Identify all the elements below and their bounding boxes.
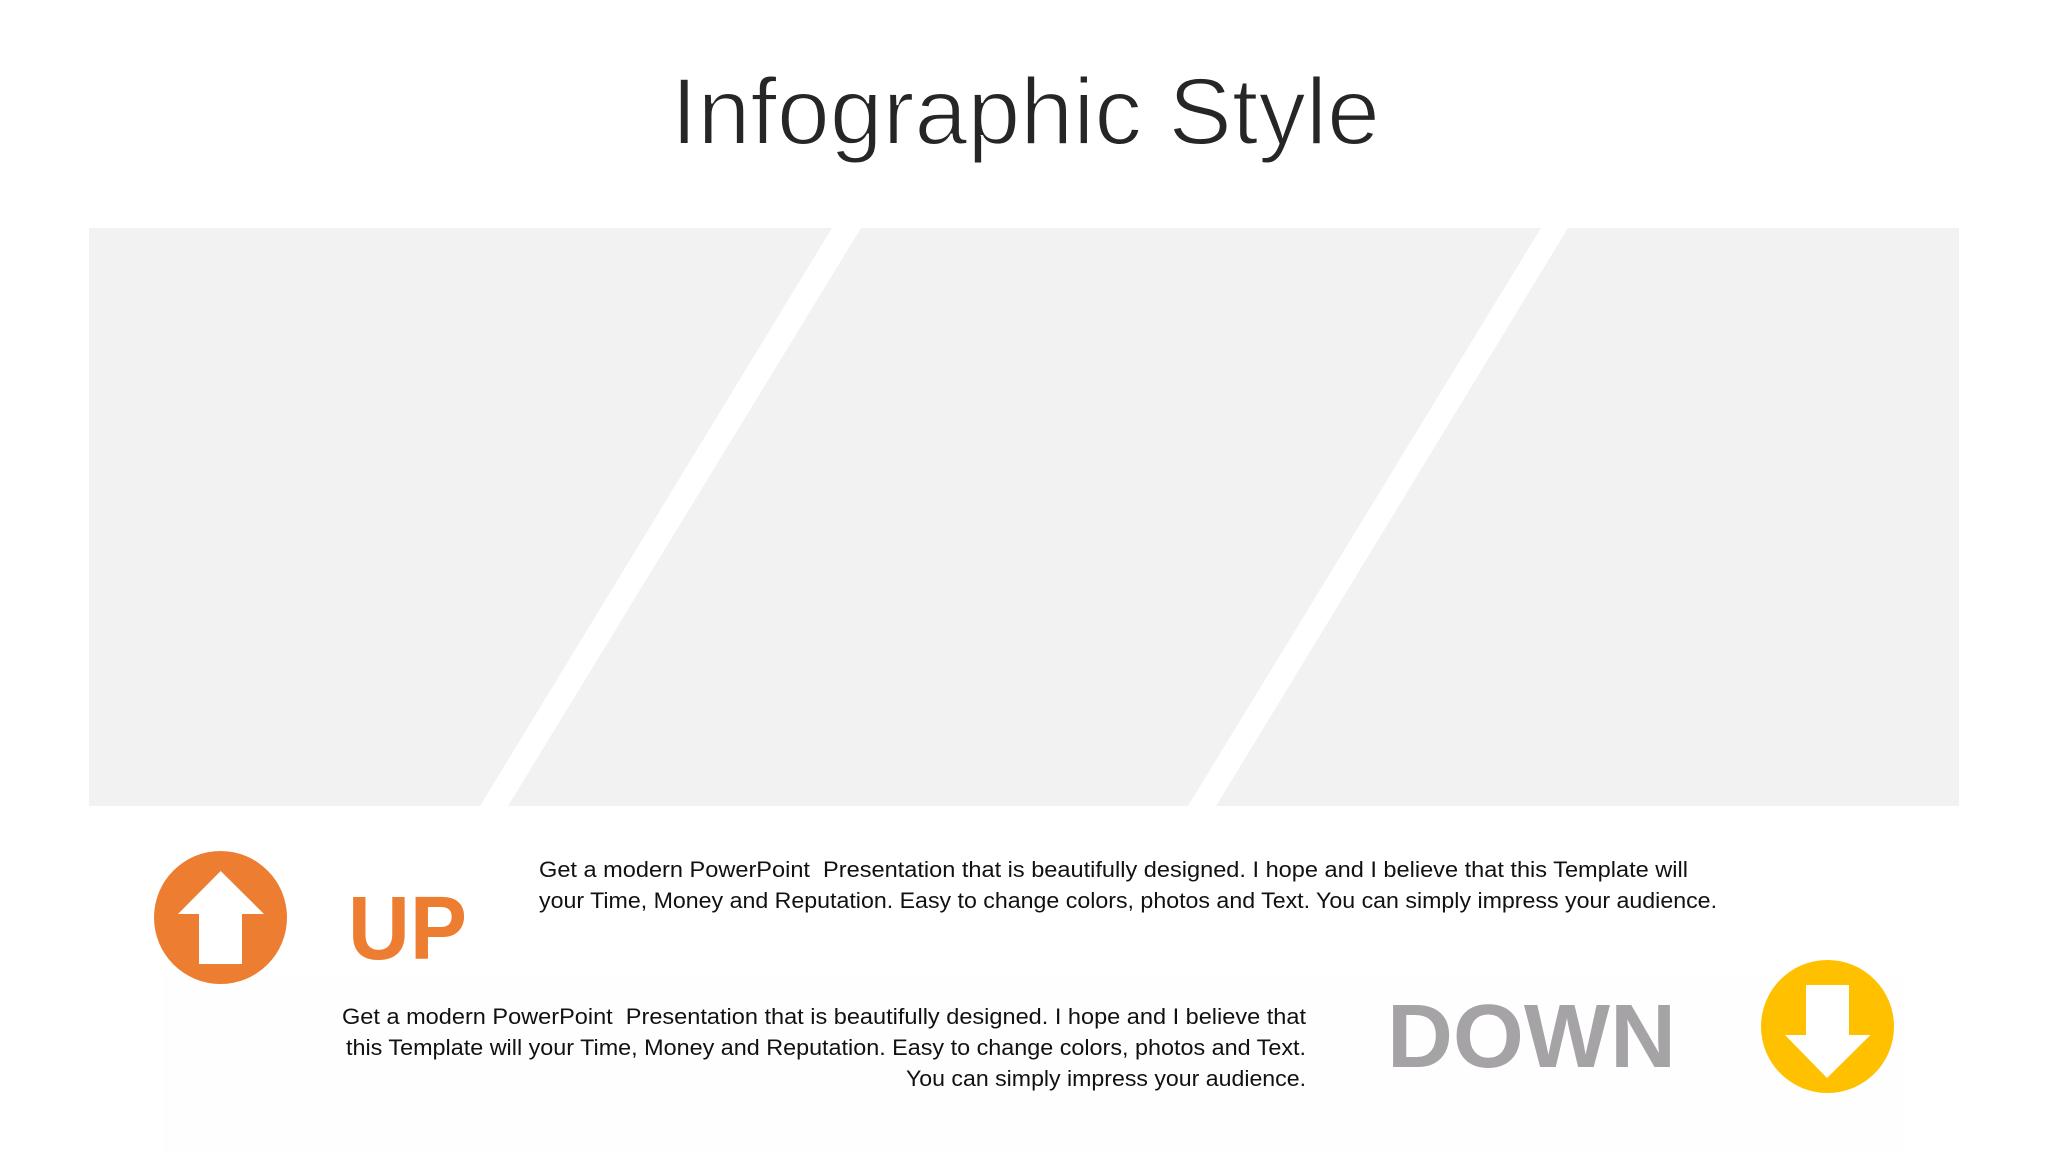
title: Infographic Style xyxy=(671,59,1380,165)
panel: three slanted placeholder areas xyxy=(89,228,1959,806)
panel: left slanted placeholder xyxy=(89,228,832,806)
text block: down description: You can simply impress your audience. xyxy=(906,1066,1306,1091)
text block: down description xyxy=(342,1004,1306,1091)
text block: up description: your Time, Money and Reputation. Easy to change colors, photos and Text. You can simply impress your audience. xyxy=(539,888,1717,913)
panel: right slanted placeholder xyxy=(1216,228,1959,806)
heading: UP: UP xyxy=(348,879,467,979)
text block: up description: Get a modern PowerPoint Presentation that is beautifully designed. I hope and I believe that this Template will xyxy=(539,857,1688,882)
heading: DOWN: DOWN xyxy=(1387,987,1676,1087)
text block: down description: Get a modern PowerPoint Presentation that is beautifully designed. I hope and I believe that xyxy=(342,1004,1306,1029)
icon: yellow circle with down arrow xyxy=(1761,960,1894,1093)
icon: orange circle with up arrow xyxy=(154,851,287,984)
panel: middle slanted placeholder xyxy=(508,228,1541,806)
text block: up description xyxy=(539,857,1717,913)
text block: down description: this Template will your Time, Money and Reputation. Easy to change colors, photos and Text. xyxy=(346,1035,1306,1060)
